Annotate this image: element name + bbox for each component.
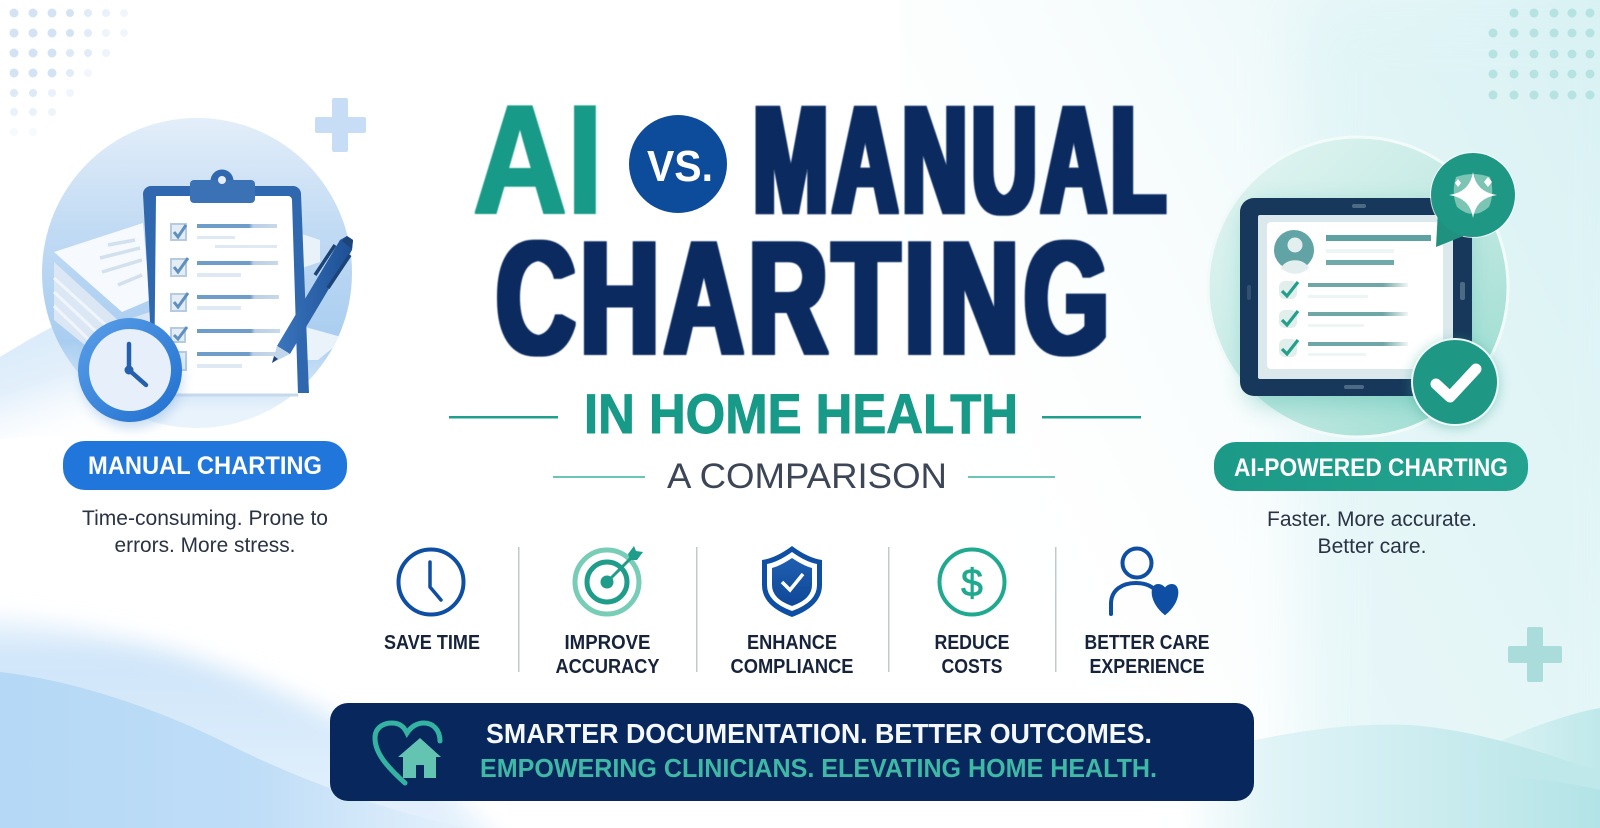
tablet card bbox=[1267, 222, 1443, 369]
benefit: improve accuracy: ACCURACY bbox=[556, 656, 660, 678]
tablet glow bbox=[1245, 205, 1470, 405]
benefit: save time: SAVE TIME bbox=[384, 632, 480, 654]
banner: SMARTER DOCUMENTATION. BETTER OUTCOMES. bbox=[486, 718, 1152, 749]
label: AI-powered charting pill: AI-POWERED CHARTING bbox=[1234, 454, 1508, 482]
benefit: reduce costs: COSTS bbox=[942, 656, 1002, 678]
divider bbox=[696, 547, 698, 672]
label: manual charting pill: MANUAL CHARTING bbox=[88, 452, 322, 480]
benefit: enhance compliance: ENHANCE bbox=[747, 632, 837, 654]
icon: plus, bottom right bbox=[1508, 627, 1562, 682]
decorative dots: top left bbox=[10, 8, 128, 136]
icon: AI speech bubble bbox=[1430, 152, 1516, 247]
banner: EMPOWERING CLINICIANS. ELEVATING HOME HEALTH. bbox=[480, 753, 1157, 783]
label: AI-powered charting pill bbox=[1214, 442, 1528, 491]
record lines bbox=[1308, 235, 1431, 356]
clipboard paper bbox=[154, 196, 298, 395]
text: AI-powered charting description bbox=[1267, 507, 1477, 558]
title bbox=[473, 73, 1170, 388]
clipboard board bbox=[143, 186, 309, 393]
icon: clock bbox=[78, 318, 182, 428]
benefit: save time bbox=[384, 550, 480, 654]
text: AI-powered charting description: Faster. More accurate. bbox=[1267, 507, 1477, 531]
icon: pen bbox=[272, 236, 353, 363]
title: AI bbox=[473, 73, 603, 246]
title: MANUAL bbox=[753, 74, 1170, 246]
text: manual charting description: Time-consuming. Prone to bbox=[82, 506, 328, 530]
stack of paper bbox=[54, 223, 345, 372]
icon: plus, top left bbox=[315, 98, 366, 152]
checks bbox=[1279, 281, 1298, 357]
benefits row bbox=[384, 546, 1210, 678]
background waves: bottom left bbox=[0, 300, 520, 828]
banner bbox=[330, 703, 1254, 801]
VS badge: VS. bbox=[647, 142, 713, 191]
divider bbox=[1055, 547, 1056, 672]
benefit: reduce costs: $ bbox=[961, 562, 983, 605]
blue circle backdrop bbox=[42, 118, 352, 428]
panel: AI-powered charting illustration bbox=[1208, 137, 1516, 437]
benefit: enhance compliance bbox=[730, 546, 854, 678]
background waves: bottom right bbox=[1180, 708, 1600, 828]
avatar bbox=[1274, 230, 1314, 274]
icon: heart with house bbox=[375, 723, 441, 783]
divider bbox=[888, 547, 890, 672]
benefit: better care experience: EXPERIENCE bbox=[1090, 656, 1204, 678]
benefit: better care experience: BETTER CARE bbox=[1084, 632, 1210, 654]
tablet buttons bbox=[1247, 204, 1465, 389]
benefit: improve accuracy bbox=[556, 546, 660, 678]
subtitle: a comparison: A COMPARISON bbox=[667, 457, 947, 496]
decorative dots: top right bbox=[1488, 8, 1594, 100]
benefit: enhance compliance: COMPLIANCE bbox=[730, 656, 854, 678]
panel: manual charting illustration bbox=[42, 118, 353, 428]
VS badge bbox=[629, 115, 727, 213]
teal circle backdrop bbox=[1208, 137, 1508, 437]
title: CHARTING bbox=[496, 208, 1114, 388]
icon: check badge bbox=[1411, 338, 1499, 428]
tablet frame bbox=[1240, 198, 1472, 396]
benefit: reduce costs bbox=[934, 550, 1010, 678]
checklist bbox=[171, 224, 280, 370]
divider bbox=[518, 547, 520, 672]
benefit: improve accuracy: IMPROVE bbox=[564, 632, 650, 654]
text: manual charting description: errors. More stress. bbox=[114, 533, 296, 557]
text: manual charting description bbox=[82, 506, 328, 557]
text: AI-powered charting description: Better care. bbox=[1318, 534, 1426, 558]
benefit: better care experience bbox=[1084, 548, 1210, 678]
subtitle: in home health: IN HOME HEALTH bbox=[584, 382, 1018, 445]
tablet screen bbox=[1258, 215, 1453, 379]
label: manual charting pill bbox=[63, 441, 347, 490]
benefit: reduce costs: REDUCE bbox=[934, 632, 1010, 654]
clipboard clip bbox=[190, 170, 255, 203]
